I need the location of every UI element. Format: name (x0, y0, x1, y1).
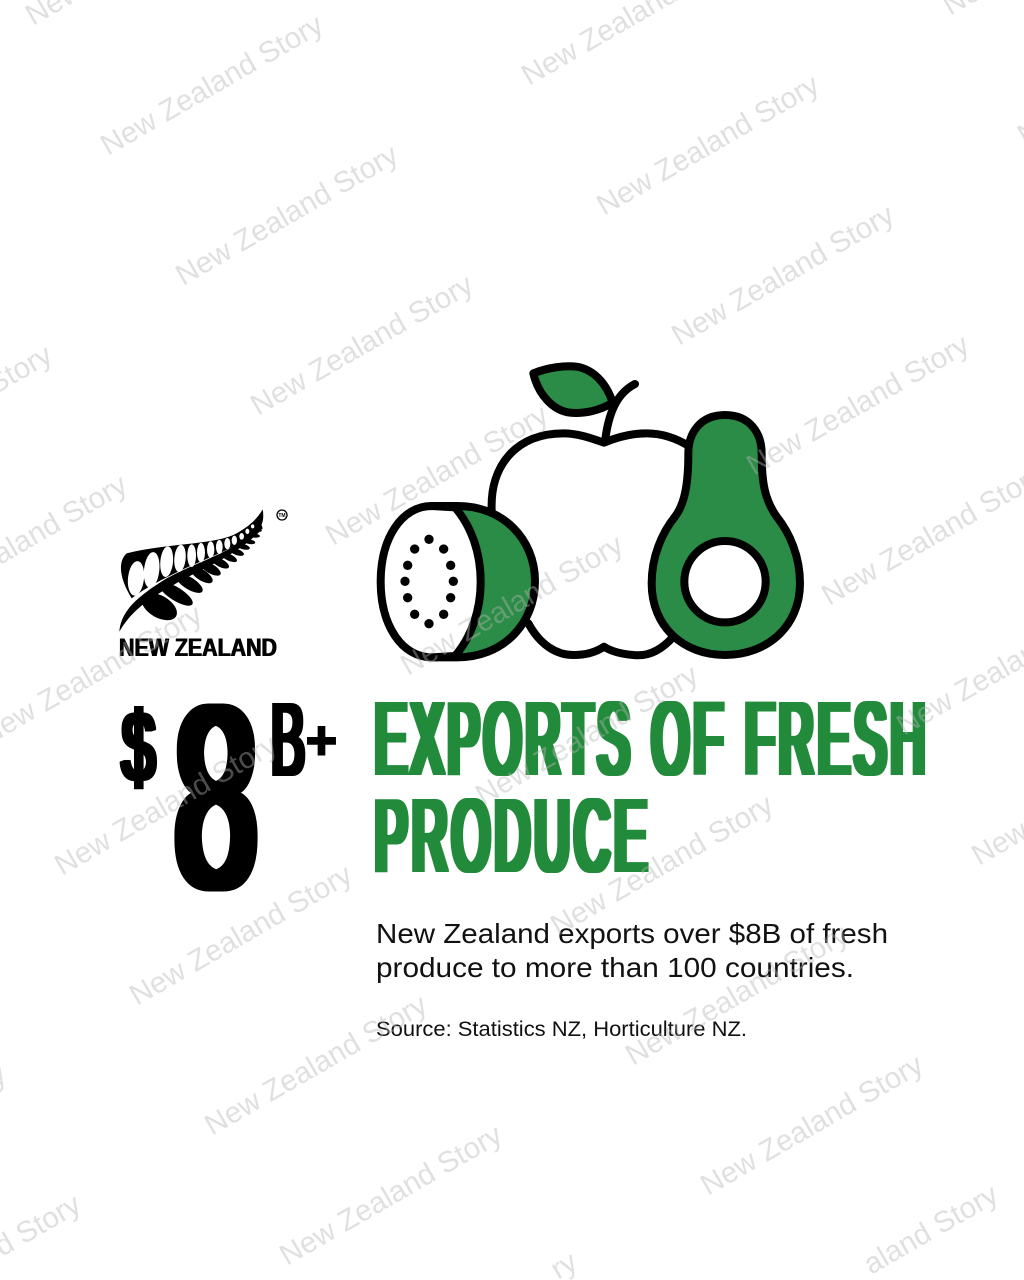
dollar sign: $ (122, 691, 155, 803)
text: New Zealand Story (545, 788, 779, 942)
digit 8: 8 (175, 653, 257, 943)
body text: produce to more than 100 countries. (376, 952, 854, 983)
heading (375, 680, 930, 894)
logo: New Zealand silver fern (119, 509, 287, 662)
logo wordmark: NEW ZEALAND (119, 634, 277, 662)
text: New Zealand Story (245, 268, 479, 422)
icon: fern (119, 509, 263, 632)
text: New Zealand Story (395, 528, 629, 682)
text: aland Story (858, 1178, 1004, 1280)
icon: fruit group (381, 366, 800, 657)
text: New Zealand Story (95, 8, 329, 162)
text: New Zealand Story (320, 398, 554, 552)
body text: New Zealand exports over $8B of fresh (376, 918, 888, 949)
plus: + (306, 712, 336, 770)
big number: $8B+ (122, 653, 336, 943)
source note: Source: Statistics NZ, Horticulture NZ. (376, 1018, 747, 1041)
text: New Zealand Story (666, 198, 900, 352)
heading: PRODUCE (375, 779, 652, 894)
text: New Zealand Story (695, 1048, 929, 1202)
text: New Zealand Story (591, 68, 825, 222)
text: New Zealand Story (470, 658, 704, 812)
text: New Zealand Story (49, 728, 283, 882)
text: New Zealand Story (274, 1118, 508, 1272)
text: New Zealand Story (199, 988, 433, 1142)
text: New Zealand Story (170, 138, 404, 292)
icon: trademark mark (277, 510, 287, 520)
text: New Zealand Story (741, 328, 975, 482)
heading: EXPORTS OF FRESH (375, 680, 930, 796)
icon: trademark mark: TM (278, 513, 286, 519)
icon: avocado (652, 415, 800, 655)
icon: apple (492, 384, 690, 655)
icon: leaf (533, 366, 613, 413)
big number: $8B+: B (271, 682, 305, 797)
text: New Zealand Story (620, 918, 854, 1072)
icon: kiwifruit (381, 506, 535, 657)
body text (376, 918, 888, 983)
text: New Zealand Story (124, 858, 358, 1012)
